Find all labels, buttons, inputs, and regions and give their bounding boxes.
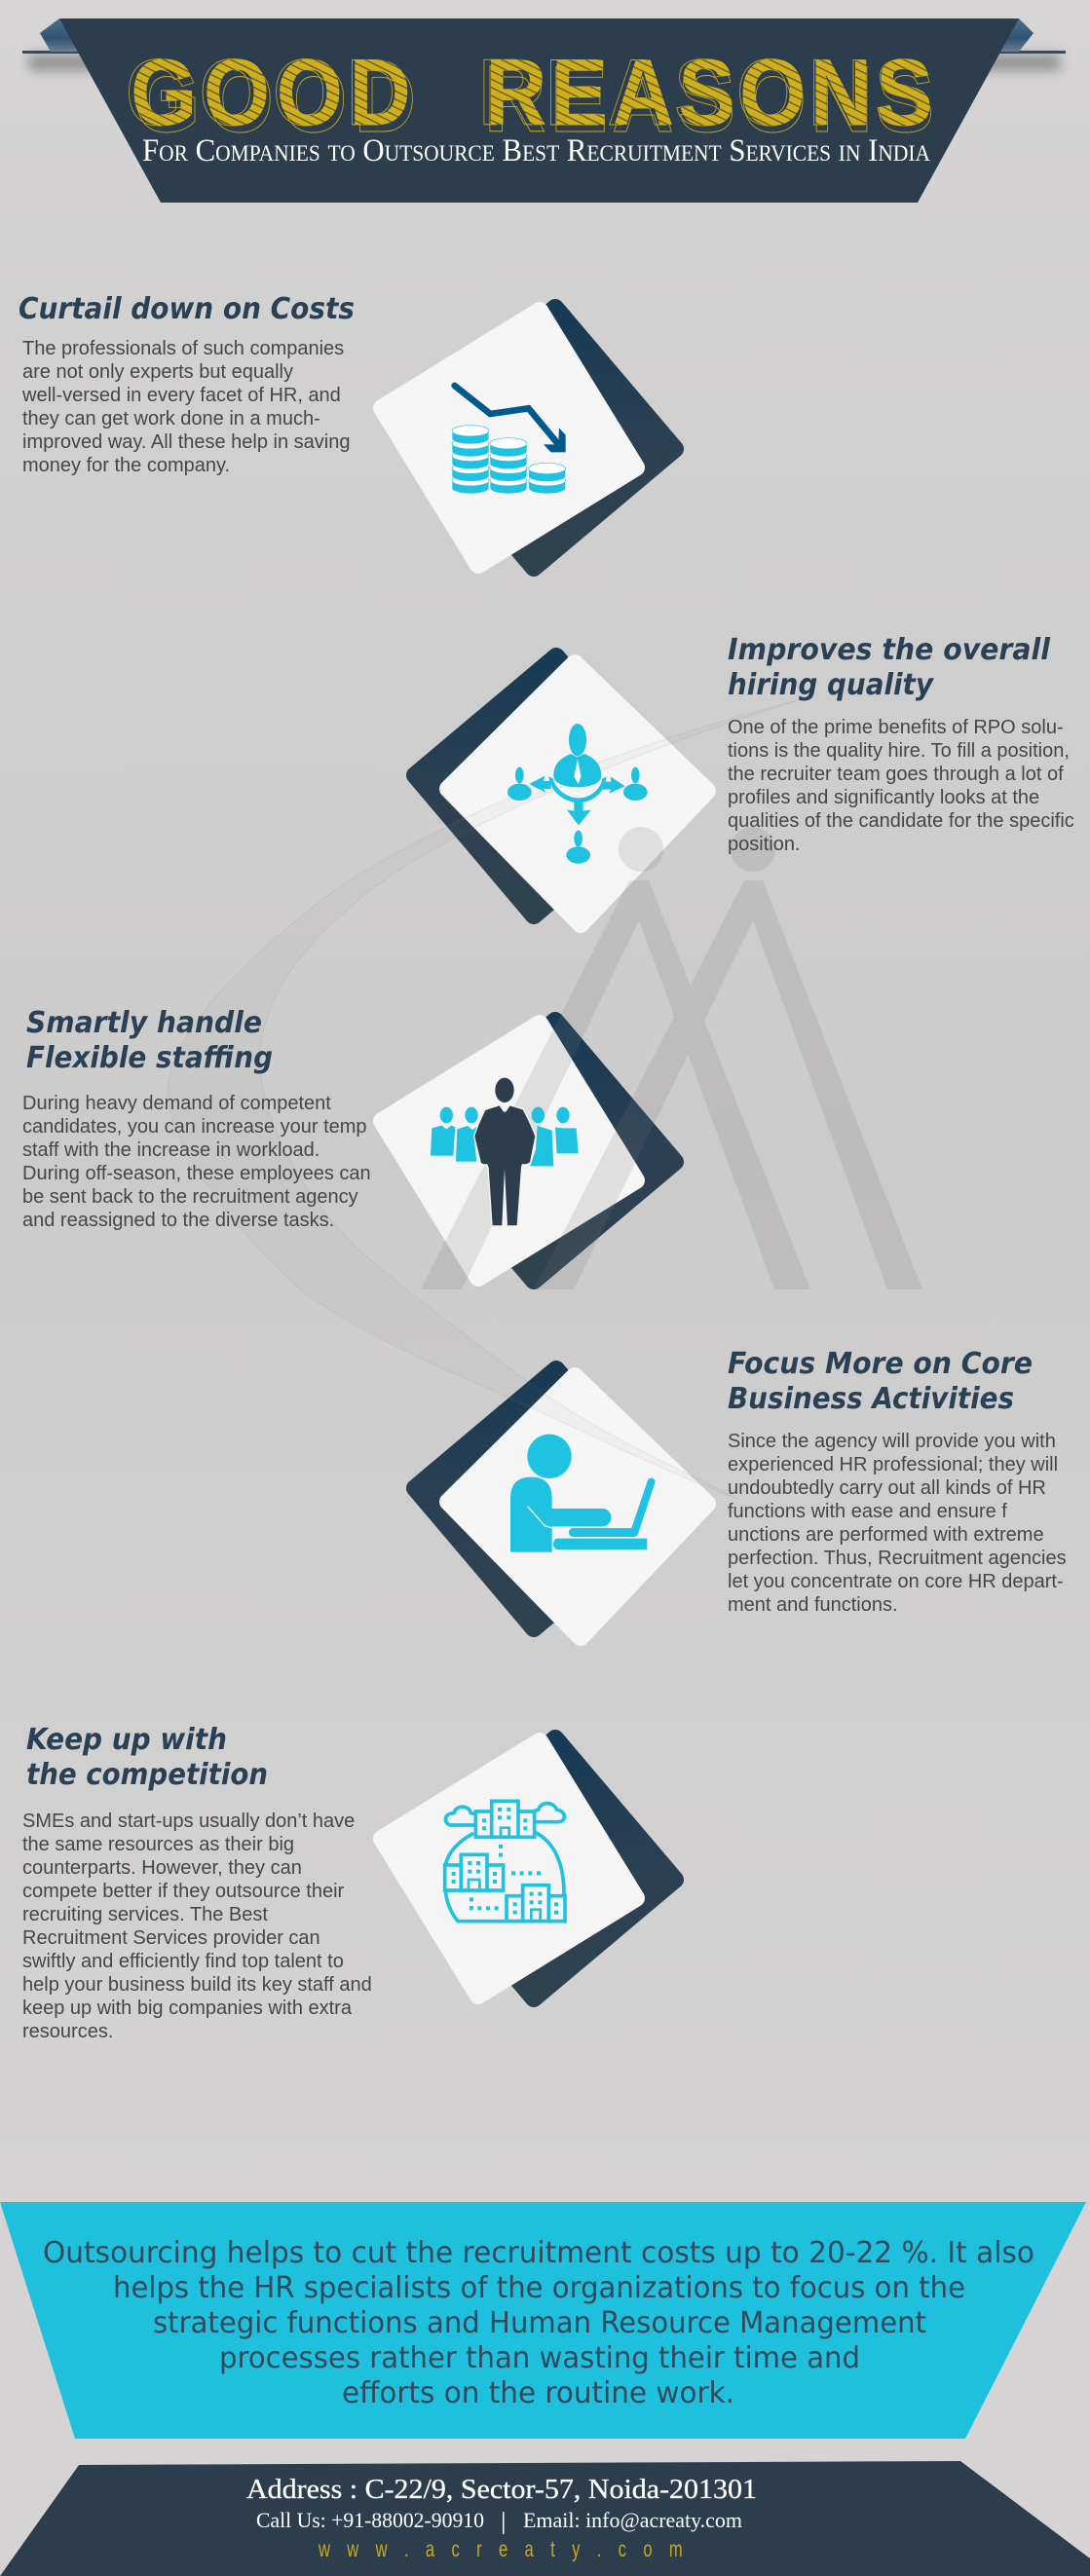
heading [26,1723,268,1792]
icon: person at laptop [510,1435,656,1552]
callout text [43,2236,1034,2410]
icon: city on a globe [445,1801,565,1922]
body text: be sent back to the recruitment agency [22,1186,358,1208]
heading: Smartly handle [26,1006,262,1040]
body text: swiftly and efficiently find top talent to [22,1951,344,1972]
watermark swoosh [168,697,808,1500]
body text: SMEs and start-ups usually don’t have [22,1811,355,1832]
body text: ment and functions. [728,1594,898,1616]
body text [22,1093,371,1231]
banner rod shadow [29,55,1060,70]
body text: the same resources as their big [22,1834,294,1855]
body text: and reassigned to the diverse tasks. [22,1210,334,1231]
body text: profiles and significantly looks at the [728,787,1039,808]
body text [728,717,1074,855]
footer: contact details [0,2461,1090,2576]
body text: well-versed in every facet of HR, and [21,385,341,406]
heading [728,633,1051,702]
body text: The professionals of such companies [22,338,344,359]
email: Email: info@acreaty.com [523,2508,742,2532]
body text: candidates, you can increase your temp [22,1116,367,1138]
heading: Focus More on Core [728,1347,1033,1381]
body text: Since the agency will provide you with [728,1431,1056,1452]
body text: perfection. Thus, Recruitment agencies [728,1548,1067,1569]
title: good reasons: GOOD [133,46,416,152]
heading [26,1006,273,1075]
heading: Keep up with [26,1723,227,1757]
body text: compete better if they outsource their [22,1881,345,1902]
body text [22,1811,372,2042]
subtitle: For Companies to Outsource Best Recruitment Services in India [142,133,930,168]
body text: money for the company. [22,455,230,476]
body text: let you concentrate on core HR depart- [728,1571,1064,1592]
body text: keep up with big companies with extra [22,1997,353,2019]
body text: they can get work done in a much- [22,408,320,429]
callout: outsourcing summary [0,2202,1086,2439]
watermark logo [421,827,922,1289]
body text [728,1431,1067,1616]
website: w w w . a c r e a t y . c o m [318,2537,683,2562]
body text: functions with ease and ensure f [728,1501,1007,1522]
footer panel [0,2461,1090,2576]
right ribbon fold [997,19,1034,52]
title: good reasons: REASONS [478,39,932,145]
body text: counterparts. However, they can [22,1857,302,1879]
body text: position. [728,834,801,855]
body text [21,338,350,476]
heading: Curtail down on Costs [19,292,355,326]
body text: the recruiter team goes through a lot of [728,764,1064,785]
body text: unctions are performed with extreme [728,1524,1044,1546]
heading: Business Activities [728,1382,1014,1416]
panel: keep up with the competition [22,1723,565,2042]
panel: focus more on core business activities [510,1347,1067,1616]
title: good reasons: REASONS [485,39,933,145]
banner rod [22,51,1066,54]
title: good reasons: GOOD [131,39,411,145]
callout text: Outsourcing helps to cut the recruitment costs up to 20-22 %. It also [43,2236,1034,2270]
body text: are not only experts but equally [22,361,293,383]
phone: Call Us: +91-88002-90910 [256,2508,484,2532]
banner trapezoid [59,19,1019,203]
body text: staff with the increase in workload. [22,1139,319,1161]
card: keep up with the competition [382,1738,675,1998]
body text: During off-season, these employees can [22,1163,371,1184]
callout text: strategic functions and Human Resource Management [153,2306,926,2340]
heading [728,1347,1033,1416]
body text: tions is the quality hire. To fill a position, [728,740,1070,762]
body text: recruiting services. The Best [22,1904,268,1925]
body text: experienced HR professional; they will [728,1454,1058,1475]
callout text: helps the HR specialists of the organizations to focus on the [113,2271,965,2305]
panel: curtail down on costs [19,292,566,494]
address: Address : C-22/9, Sector-57, Noida-201301 [246,2475,757,2505]
title: good reasons: GOOD [126,39,408,145]
body text: During heavy demand of competent [22,1093,331,1114]
icon: leader with team [431,1078,579,1225]
left ribbon fold [40,19,80,52]
title: good reasons [126,39,934,152]
heading: hiring quality [728,668,934,702]
icon: manager delegating to team [507,724,648,864]
callout text: processes rather than wasting their time and [219,2341,860,2375]
panel: smartly handle flexible staffing [22,1006,579,1231]
body text: qualities of the candidate for the specific [728,810,1074,832]
callout text: efforts on the routine work. [342,2376,734,2410]
header banner [22,19,1066,203]
divider [503,2512,505,2534]
card: curtail down on costs [382,308,675,568]
body text: resources. [22,2021,113,2042]
panel: improves the overall hiring quality [507,633,1074,864]
body text: help your business build its key staff and [22,1974,372,1996]
heading: Improves the overall [728,633,1051,667]
callout trapezoid [0,2202,1086,2439]
body text: One of the prime benefits of RPO solu- [728,717,1064,738]
card: core business activities [415,1369,707,1637]
heading: the competition [26,1758,268,1792]
body text: undoubtedly carry out all kinds of HR [728,1477,1046,1499]
title: good reasons: REASONS [484,46,934,152]
card: improves hiring quality [415,656,707,924]
card: flexible staffing [382,1021,675,1281]
icon: coins and falling arrow [452,386,566,494]
heading: Flexible staffing [26,1041,273,1075]
body text: improved way. All these help in saving [22,431,350,453]
body text: Recruitment Services provider can [22,1927,320,1949]
